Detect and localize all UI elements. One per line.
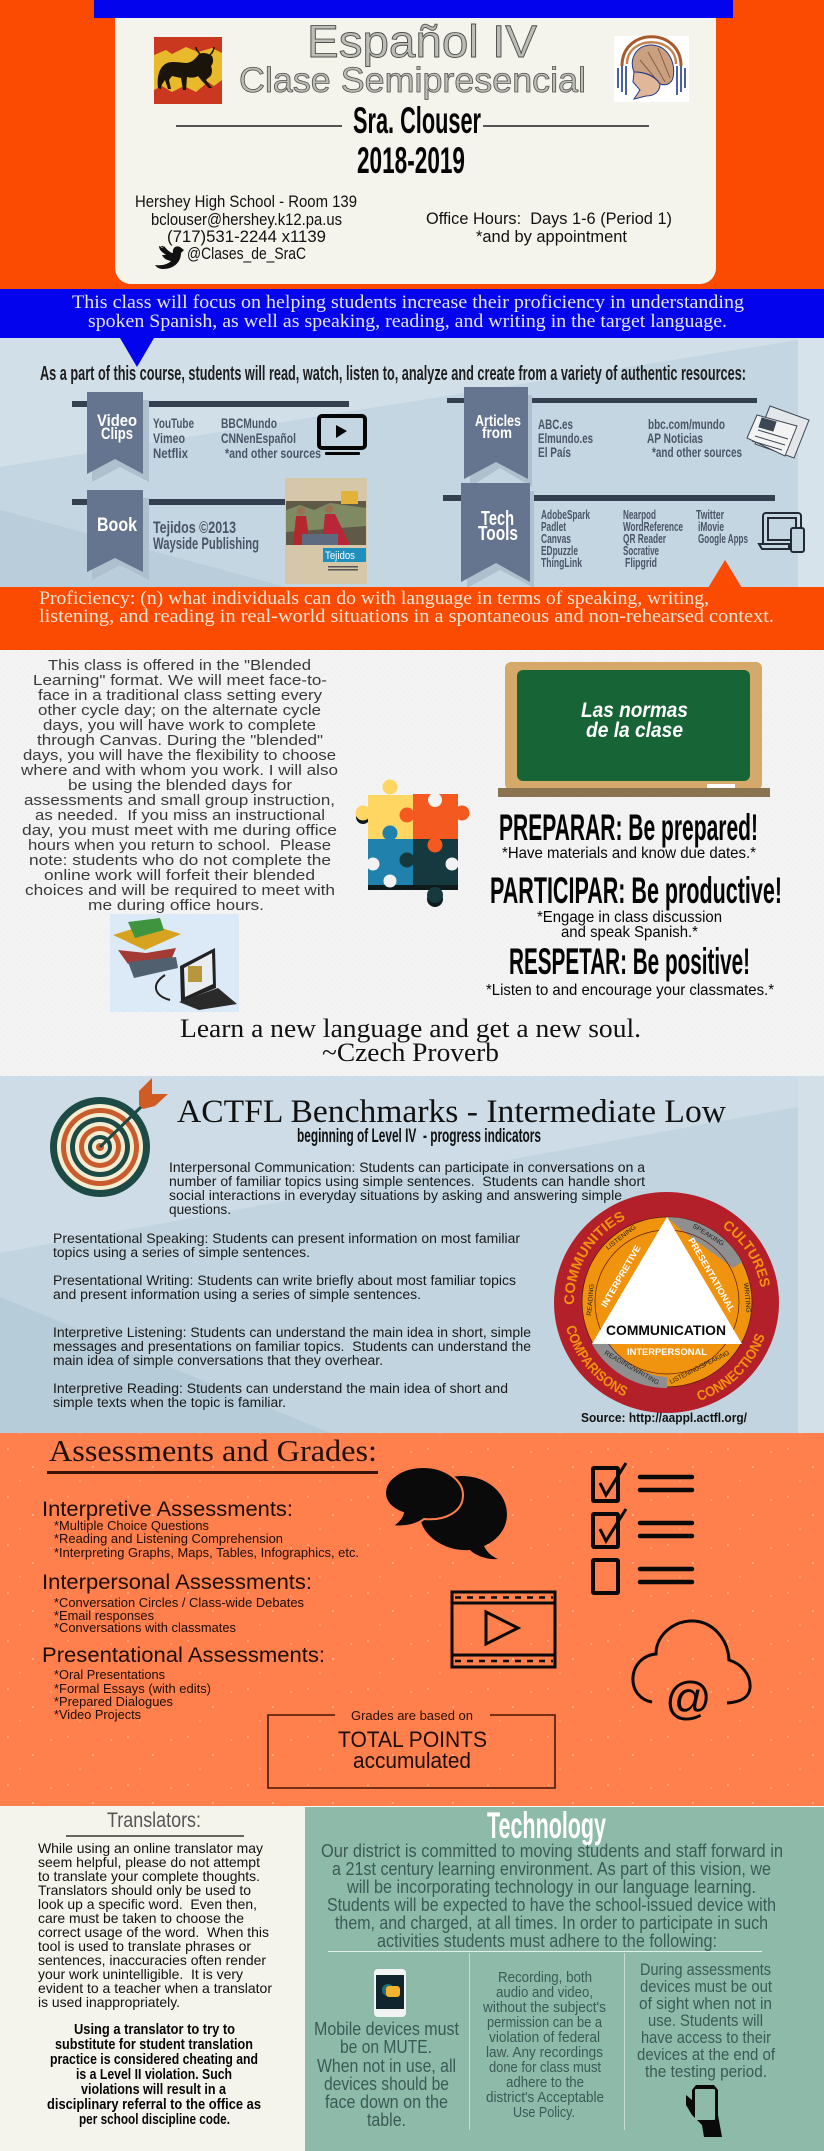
text block: district vision: them, and charged, at all times. In order to participate in such [335, 1913, 768, 1933]
icon: speech bubbles [385, 1467, 507, 1559]
chart: communication wheel: CULTURES [724, 1221, 770, 1287]
panel: articles: *and other sources [652, 444, 742, 460]
text block: translator advice: care must be taken to choose the [38, 1910, 244, 1926]
text block: district vision [321, 1841, 783, 1951]
callout: grading: TOTAL POINTS [338, 1727, 487, 1752]
text block: blended learning: note: students who do not complete the [29, 853, 331, 869]
text block: assessment types: *Reading and Listening Comprehension [54, 1531, 283, 1546]
panel: book [72, 478, 367, 584]
panel: book: Book [97, 515, 137, 536]
text block: assessment types: Interpersonal Assessments: [42, 1570, 312, 1594]
text block: assessment devices: During assessments [640, 1960, 771, 1979]
panel: video clips [72, 392, 365, 482]
text block: translator warning [47, 2022, 261, 2128]
icon: hand holding phone [686, 2085, 722, 2137]
chart: communication wheel: WRITING [742, 1283, 752, 1313]
panel: tech tools: Socrative [623, 544, 659, 558]
quote: ~Czech Proverb [322, 1038, 499, 1067]
book cover [285, 478, 367, 584]
grey arc: speaking [667, 1217, 742, 1268]
text block: blended learning: other cycle day; on the alternate cycle [38, 703, 321, 719]
text block: recording: without the subject's [482, 1999, 606, 2016]
quote: Learn a new language and get a new soul. [180, 1014, 641, 1043]
text block: benchmark descriptions: Presentational Speaking: Students can present information on most familiar [53, 1231, 521, 1246]
panel: tech tools: Flipgrid [625, 556, 657, 570]
chart: communication wheel: INTERPRETIVE [599, 1243, 643, 1309]
contact details: Hershey High School - Room 139 [135, 192, 357, 211]
icon: mobile phone [374, 1969, 406, 2017]
panel: proficiency definition: listening, and reading in real-world situations in a spontaneous and non-rehearsed context. [39, 606, 774, 627]
text block: benchmark descriptions: topics using a series of simple sentences. [53, 1245, 310, 1260]
teacher name and year: Sra. Clouser [353, 100, 481, 141]
icon: video player [319, 416, 365, 455]
text block: translator advice: correct usage of the word. When this [38, 1924, 269, 1940]
text block: recording: district's Acceptable [486, 2089, 604, 2106]
text block: benchmark descriptions: messages and presentations on familiar topics. Students can understand the [53, 1339, 531, 1354]
panel: video clips: *and other sources [225, 445, 321, 461]
text block: translator advice: evident to a teacher when a translator [38, 1980, 272, 1996]
text block: mobile devices: table. [367, 2110, 406, 2130]
panel: book: Wayside Publishing [153, 534, 259, 553]
panel: video clips: Clips [101, 424, 133, 443]
text block: assessment types: *Prepared Dialogues [54, 1694, 173, 1709]
panel: ACTFL benchmarks background [0, 1076, 824, 1433]
text block: translator advice: While using an online translator may [38, 1840, 263, 1856]
panel: articles: ABC.es [538, 416, 573, 432]
text block: blended learning: Learning" format. We will meet face-to- [33, 673, 327, 689]
text block: blended learning: where and with whom you work. I will also [20, 763, 338, 779]
text block: benchmark descriptions: Presentational Writing: Students can write briefly about most familiar topics [53, 1273, 516, 1288]
chart: communication wheel: SPEAKING [691, 1223, 725, 1248]
panel: articles: Articles [475, 413, 521, 430]
text block: translator advice: to translate your complete thoughts. [38, 1868, 260, 1884]
icon: newspapers [747, 406, 809, 458]
text block: blended learning: be using the blended days for [68, 778, 292, 794]
contact details: @Clases_de_SraC [187, 244, 306, 263]
panel: blended learning background [0, 650, 824, 1076]
text block: assessment types: *Conversations with classmates [54, 1620, 236, 1635]
source note: Source: http://aappl.actfl.org/ [581, 1411, 747, 1425]
text block: blended learning: assessments and small group instruction, [24, 793, 335, 809]
panel: video clips: Vimeo [153, 430, 185, 446]
text block: assessment types: *Email responses [54, 1608, 154, 1623]
teacher name and year: 2018-2019 [357, 140, 465, 181]
icon: cloud with at sign [633, 1621, 750, 1724]
text block: assessment types: *Multiple Choice Questions [54, 1518, 209, 1533]
class rules: *Have materials and know due dates.* [502, 845, 756, 862]
panel: header [0, 0, 824, 290]
chart: communication wheel: COMMUNICATION [606, 1322, 726, 1338]
icon: checklist [593, 1463, 692, 1593]
panel: tech tools: Nearpod [623, 508, 656, 522]
chart: communication wheel: INTERPERSONAL [627, 1347, 707, 1358]
text block: recording: done for class must [489, 2059, 602, 2076]
icon: chalkboard: de la clase [586, 719, 683, 742]
panel: resources background [0, 338, 824, 588]
panel: tech tools: AdobeSpark [541, 508, 590, 522]
text block: district vision: a 21st century learning environment. As part of this vision, we [332, 1859, 771, 1879]
text block: recording: Recording, both [498, 1969, 592, 1986]
text block: translator warning: practice is considered cheating and [50, 2052, 258, 2068]
text block: district vision: Students will be expected to have the school-issued device with [327, 1895, 776, 1915]
panel: tech tools: EDpuzzle [541, 544, 578, 558]
text block: recording: adhere to the [506, 2074, 584, 2091]
text block: blended learning: hours when you return to school. Please [28, 838, 331, 854]
text block: recording: Use Policy. [513, 2104, 575, 2121]
text block: blended learning: days, you will have work to complete [43, 718, 316, 734]
panel: tech tools: Twitter [696, 508, 724, 522]
text block: blended learning: as needed. If you miss an instructional [35, 808, 325, 824]
panel: book: Tejidos ©2013 [153, 518, 236, 537]
title: Clase Semipresencial [239, 61, 586, 100]
text block: translator warning: per school discipline code. [79, 2112, 230, 2128]
text block: benchmark descriptions: number of familiar topics using simple sentences. Students can handle short [169, 1174, 645, 1189]
text block: district vision: will be incorporating technology in our language learning. [346, 1877, 756, 1897]
text block: translator warning: substitute for student translation [55, 2037, 253, 2053]
panel: video clips: YouTube [153, 415, 194, 431]
text block: translator warning: is a Level II violation. Such [76, 2067, 232, 2083]
text block: translator warning: violations will result in a [81, 2082, 227, 2098]
text block: blended learning: me during office hours. [88, 898, 264, 914]
panel: course focus banner: This class will focus on helping students increase their proficiency in understanding [72, 292, 745, 313]
text block: blended learning: This class is offered in the "Blended [48, 658, 311, 674]
panel: proficiency definition: Proficiency: (n) what individuals can do with language in terms of speaking, writing, [39, 588, 709, 609]
text block: mobile devices: face down on the [325, 2092, 448, 2112]
callout: grading [268, 1708, 555, 1788]
icon: target with arrow [50, 1078, 168, 1197]
text block: assessment types: Interpretive Assessments: [42, 1497, 293, 1521]
heading: ACTFL benchmarks: ACTFL Benchmarks - Intermediate Low [177, 1094, 726, 1130]
panel: assessments background [0, 1433, 824, 1806]
text block: assessment types: *Conversation Circles / Class-wide Debates [54, 1595, 304, 1610]
panel: tech tools: Tools [478, 523, 518, 545]
class rules [486, 807, 782, 999]
teacher name and year [176, 100, 649, 181]
text block: assessment devices: of sight when not in [639, 1994, 772, 2013]
panel: tech tools: ThingLink [541, 556, 582, 570]
contact details: (717)531-2244 x1139 [167, 227, 326, 246]
heading: ACTFL benchmarks: beginning of Level IV - progress indicators [297, 1126, 541, 1147]
panel: tech tools: Canvas [541, 532, 571, 546]
text block: mobile devices: devices should be [324, 2074, 449, 2094]
icon: twitter bird [155, 246, 184, 269]
panel: tech tools: Tech [481, 508, 514, 530]
text block: benchmark descriptions: social interactions in everyday situations by asking and answering simple [169, 1188, 622, 1203]
text block: assessment types [42, 1497, 359, 1722]
text block: mobile devices: Mobile devices must [314, 2019, 459, 2039]
panel: articles: bbc.com/mundo [648, 416, 725, 432]
panel: proficiency definition [0, 560, 824, 650]
office hours: *and by appointment [476, 227, 627, 246]
chart: communication wheel: READING/WRITING [603, 1350, 660, 1387]
text block: district vision: Our district is committed to moving students and staff forward in [321, 1841, 783, 1861]
text block: blended learning: day, you must meet with me during office [22, 823, 337, 839]
text block: benchmark descriptions: and present information using a series of simple sentences. [53, 1287, 421, 1302]
panel: articles: Elmundo.es [538, 430, 593, 446]
chart: communication wheel [554, 1192, 779, 1413]
text block: assessment devices: the testing period. [645, 2062, 767, 2081]
office hours [426, 209, 672, 246]
text block: translator advice: your work unintelligible. It is very [38, 1966, 243, 1982]
text block: district vision: activities students must adhere to the following: [377, 1931, 717, 1951]
heading: ACTFL benchmarks [177, 1094, 726, 1147]
text block: recording: law. Any recordings [486, 2044, 603, 2061]
panel: tech tools: iMovie [698, 520, 724, 534]
text block: benchmark descriptions: Interpretive Reading: Students can understand the main idea of short and [53, 1381, 508, 1396]
icon: cloud with at sign: @ [665, 1672, 712, 1724]
text block: assessment types: *Oral Presentations [54, 1667, 165, 1682]
text block: recording [482, 1969, 606, 2121]
text block: blended learning: days, you will have the flexibility to choose [23, 748, 336, 764]
icon: puzzle [356, 780, 470, 907]
chart: communication wheel: COMMUNITIES [564, 1212, 624, 1304]
text block: blended learning: choices and will be required to meet with [25, 883, 335, 899]
header card [115, 10, 716, 284]
text block: recording: permission can be a [487, 2014, 603, 2031]
text block: translator advice: tool is used to translate phrases or [38, 1938, 251, 1954]
panel: articles: AP Noticias [647, 430, 703, 446]
text block: benchmark descriptions: Interpretive Listening: Students can understand the main idea in short, simple [53, 1325, 531, 1340]
text block: assessment types: *Interpreting Graphs, Maps, Tables, Infographics, etc. [54, 1545, 359, 1560]
chart: communication wheel: READING [586, 1284, 596, 1316]
text block: mobile devices: be on MUTE. [340, 2037, 432, 2057]
panel: video clips: Video [97, 411, 137, 430]
text block: translator advice [38, 1840, 272, 2010]
text block: assessment types: Presentational Assessments: [42, 1643, 325, 1667]
title [239, 16, 586, 100]
text block: translator advice: sentences, inaccuracies often render [38, 1952, 266, 1968]
panel: video clips: CNNenEspañol [221, 430, 296, 446]
icon: film play [452, 1592, 555, 1667]
callout: grading: accumulated [353, 1748, 471, 1773]
quote [180, 1014, 641, 1067]
text block: blended learning: through Canvas. During the "blended" [37, 733, 323, 749]
text block: mobile devices: When not in use, all [317, 2056, 456, 2076]
text block: blended learning: online work will forfeit their blended [44, 868, 315, 884]
class rules: and speak Spanish.* [561, 924, 698, 941]
panel: tech tools [443, 483, 804, 588]
icon: chalkboard: Las normas [581, 699, 688, 722]
icon: Spanish flag bull [154, 37, 222, 104]
icon: chalkboard [498, 662, 770, 797]
panel: articles: El País [538, 444, 571, 460]
grey arc: reading writing [592, 1344, 667, 1388]
book cover: Tejidos [325, 550, 355, 562]
panel: technology: Technology [487, 1805, 606, 1846]
text block: assessment devices: devices at the end of [637, 2045, 775, 2064]
panel: technology [305, 1805, 824, 2151]
text block: assessment devices [637, 1960, 775, 2081]
text block: assessment devices: have access to their [641, 2028, 771, 2047]
text block: benchmark descriptions: simple texts when the topic is familiar. [53, 1395, 286, 1410]
text block: assessment types: *Video Projects [54, 1707, 141, 1722]
text block: assessment types: *Formal Essays (with edits) [54, 1681, 211, 1696]
text block: recording: audio and video, [496, 1984, 593, 2001]
heading: assessments and grades: Assessments and Grades: [49, 1433, 377, 1468]
text block: recording: violation of federal [489, 2029, 600, 2046]
text block: translator advice: seem helpful, please do not attempt [38, 1854, 260, 1870]
text block: assessment devices: use. Students will [648, 2011, 763, 2030]
text block: benchmark descriptions [53, 1160, 646, 1410]
contact details: bclouser@hershey.k12.pa.us [151, 210, 342, 229]
text block: mobile devices [314, 2019, 459, 2130]
chart: communication wheel: LISTENING [605, 1224, 638, 1252]
chart: communication wheel: LISTENING/SPEAKING [669, 1350, 731, 1386]
icon: school warrior logo [614, 36, 689, 102]
title: Español IV [307, 16, 537, 67]
text block: translator advice: look up a specific word. Even then, [38, 1896, 257, 1912]
panel: articles: from [482, 425, 512, 442]
icon: books and laptop [110, 914, 239, 1012]
panel: translators: Translators: [107, 1809, 201, 1832]
text block: translator advice: Translators should only be used to [38, 1882, 251, 1898]
panel: video clips: Netflix [153, 445, 188, 461]
office hours: Office Hours: Days 1-6 (Period 1) [426, 209, 672, 228]
text block: benchmark descriptions: main idea of simple conversations that they overhear. [53, 1353, 383, 1368]
text block: assessment devices: devices must be out [640, 1977, 772, 1996]
text block: translator warning: Using a translator to try to [74, 2022, 235, 2038]
chart: communication wheel: CONNECTIONS [697, 1334, 764, 1400]
callout: grading: Grades are based on [351, 1708, 473, 1723]
class rules: *Engage in class discussion [537, 909, 722, 926]
panel: course focus banner: spoken Spanish, as well as speaking, reading, and writing in the target language. [88, 311, 727, 332]
panel: articles [447, 387, 809, 487]
panel: translators [0, 1806, 305, 2151]
contact details [135, 192, 357, 269]
blue top bar [94, 0, 733, 18]
text block: blended learning [20, 658, 338, 914]
panel: tech tools: QR Reader [623, 532, 666, 546]
panel: tech tools: Padlet [541, 520, 567, 534]
chart: communication wheel: PRESENTATIONAL [686, 1236, 737, 1314]
panel: tech tools: Google Apps [698, 532, 748, 546]
panel: tech tools: WordReference [623, 520, 683, 534]
text block: blended learning: face in a traditional class setting every [38, 688, 323, 704]
class rules: *Listen to and encourage your classmates.* [486, 982, 774, 999]
text block: benchmark descriptions: Interpersonal Communication: Students can participate in conversations on a [169, 1160, 646, 1175]
text block: translator warning: disciplinary referral to the office as [47, 2097, 261, 2113]
panel: course focus banner [0, 289, 824, 367]
text block: benchmark descriptions: questions. [169, 1202, 231, 1217]
icon: laptop and phone [759, 513, 804, 552]
panel: video clips: BBCMundo [221, 415, 277, 431]
text block: translator advice: is used inappropriately. [38, 1994, 180, 2010]
chart: communication wheel: COMPARISONS [566, 1326, 628, 1396]
